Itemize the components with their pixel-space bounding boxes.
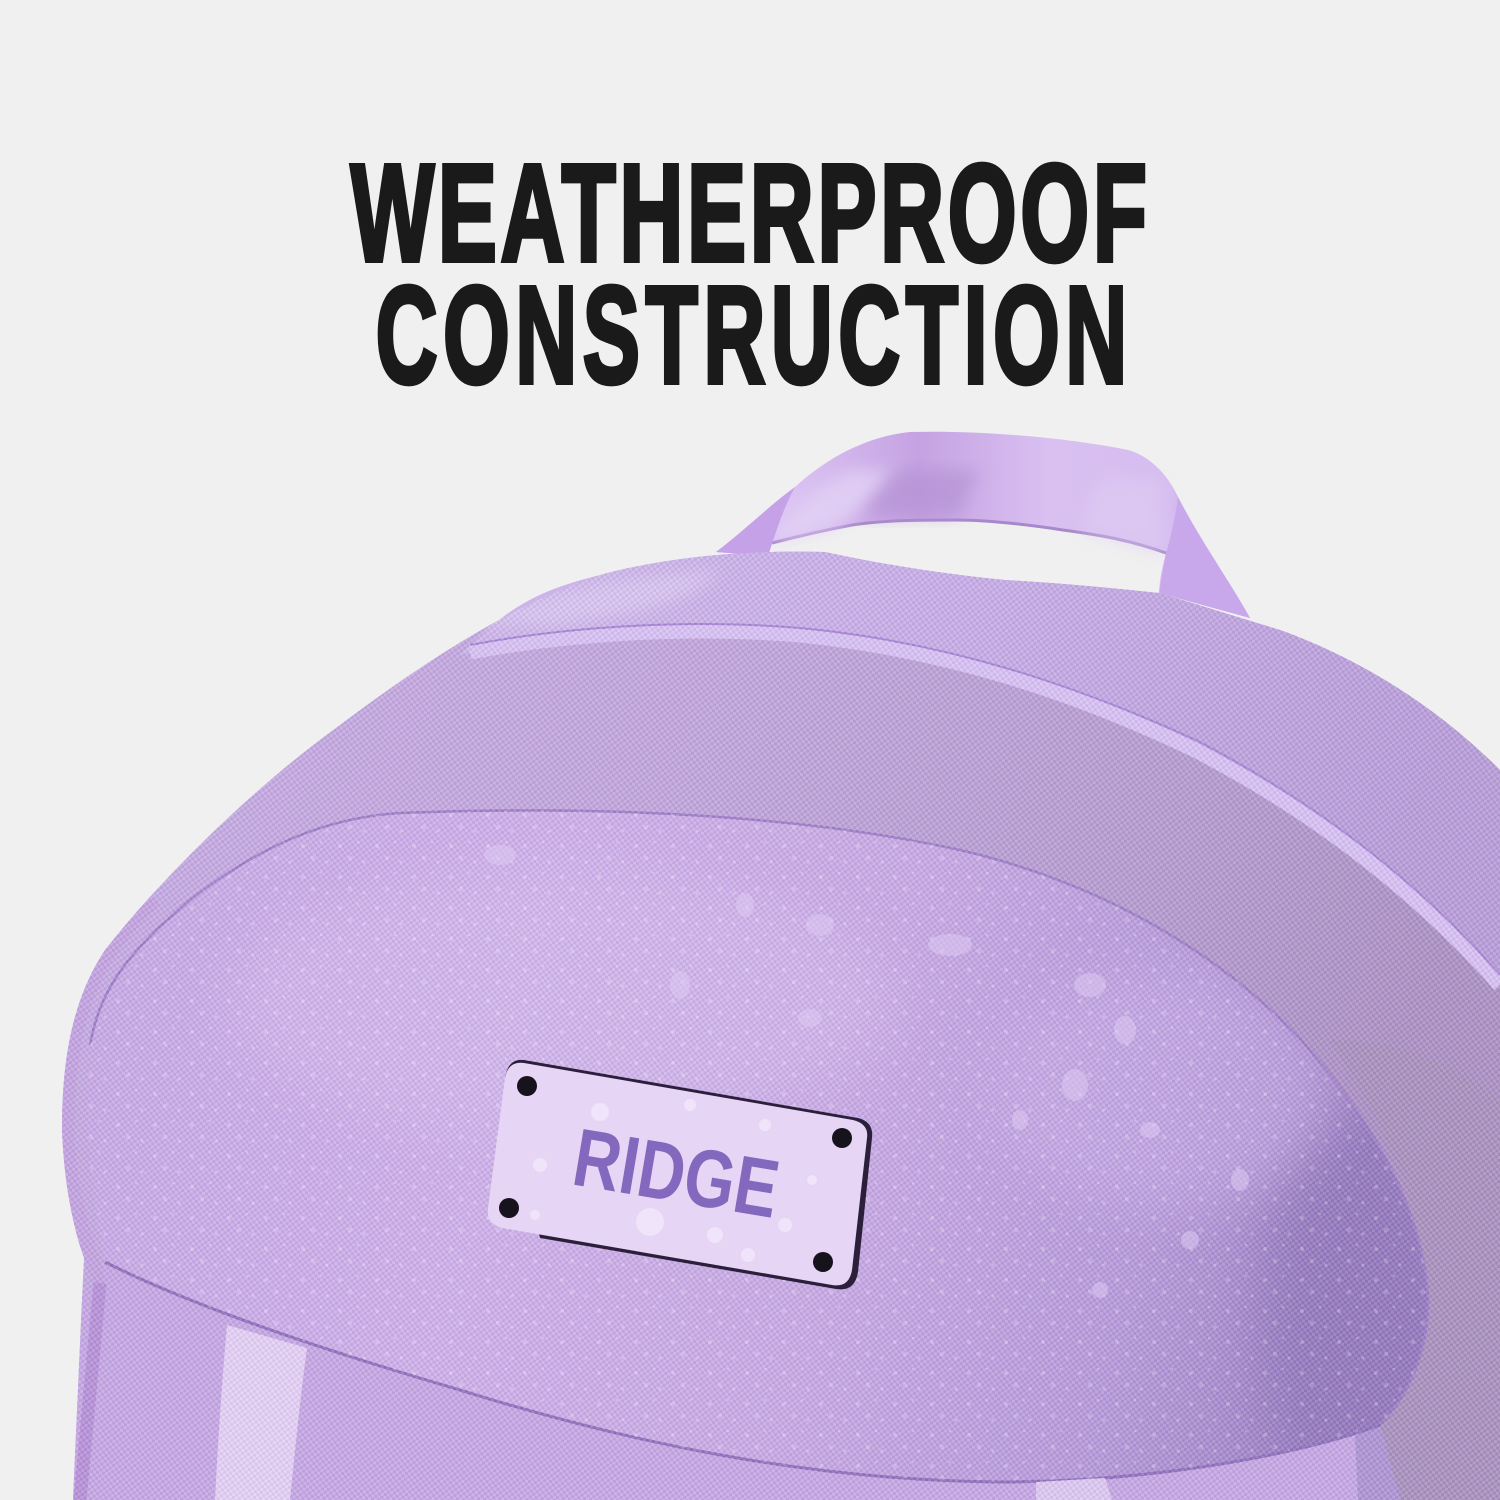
side piping xyxy=(68,900,155,1500)
back body silhouette xyxy=(62,552,1500,1500)
left strap xyxy=(215,1325,307,1500)
side gusset shading xyxy=(1355,1425,1400,1500)
top carry handle xyxy=(716,432,1250,618)
zipper stitch line xyxy=(470,624,1500,975)
backpack illustration xyxy=(62,432,1500,1500)
zipper tape xyxy=(470,631,1500,985)
water droplets on pocket xyxy=(80,805,1430,1485)
front pocket xyxy=(88,810,1480,1500)
badge wordmark: RIDGE xyxy=(567,1112,785,1236)
wet sheen on top strip xyxy=(492,572,708,624)
right side panel xyxy=(1330,1040,1500,1500)
title: CONSTRUCTION xyxy=(376,259,1127,413)
title: WEATHERPROOF xyxy=(351,135,1147,290)
badge plate xyxy=(488,1063,867,1285)
RIDGE badge xyxy=(488,1060,872,1289)
title xyxy=(351,135,1147,413)
fabric weave xyxy=(62,552,1500,1500)
lower centre strap xyxy=(1036,1478,1112,1500)
badge shadow xyxy=(505,1060,872,1289)
rivets xyxy=(499,1076,852,1272)
lower body front xyxy=(73,1262,1400,1500)
top strip above zipper xyxy=(460,552,1500,975)
badge droplets xyxy=(530,1099,817,1262)
